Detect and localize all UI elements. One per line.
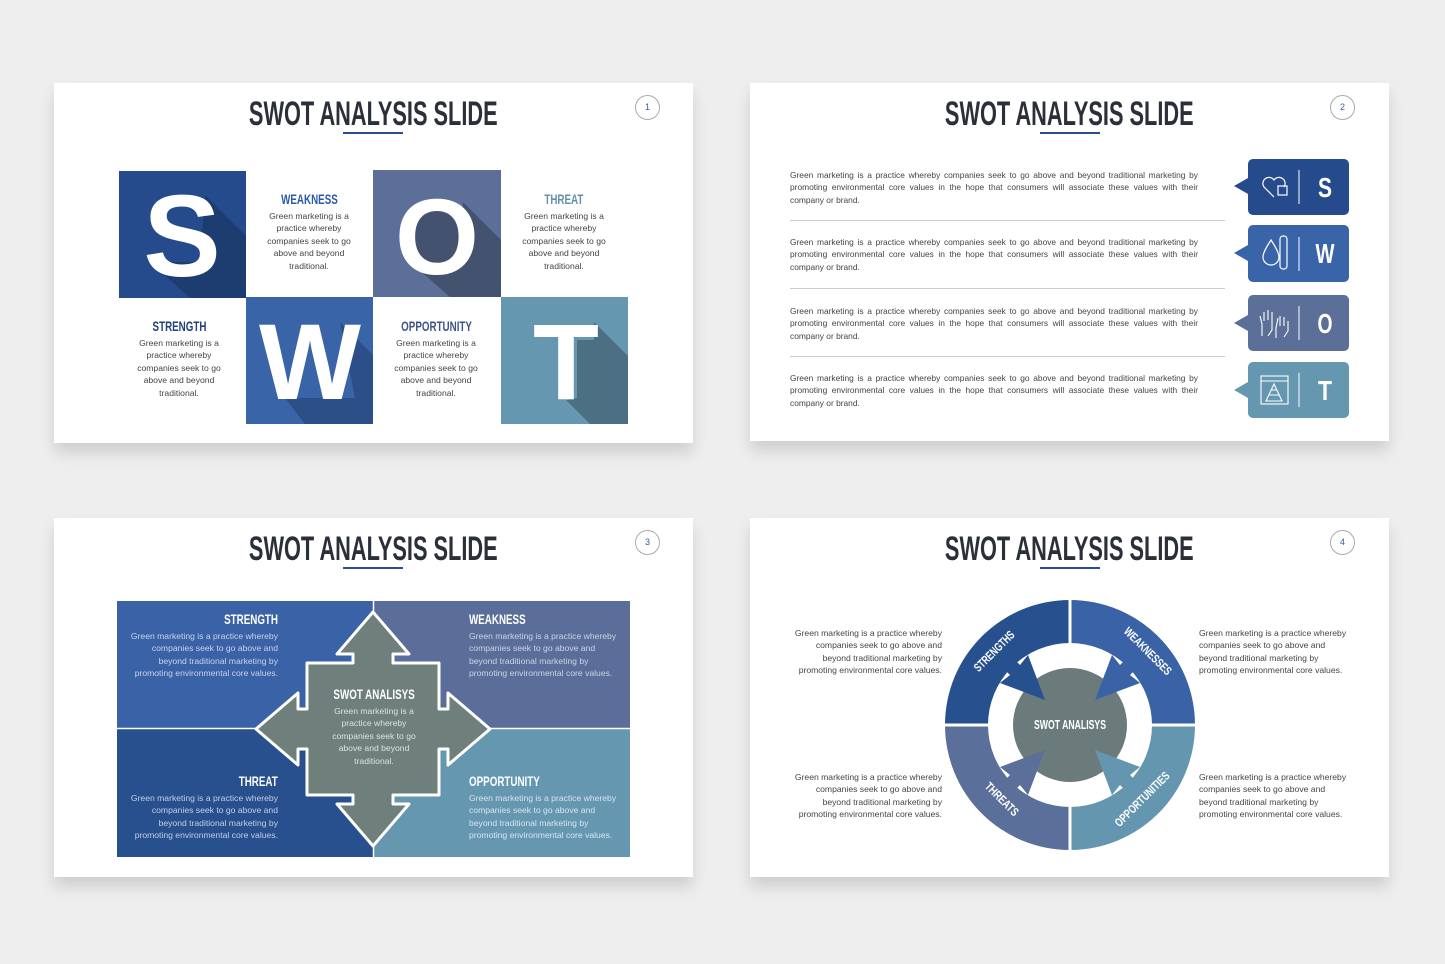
text rows — [790, 170, 1225, 408]
slide number 2 — [1330, 95, 1355, 120]
panel: slide 3 — [54, 518, 693, 877]
text rows: Green marketing is a practice whereby companies seek to go above and beyond traditional marketing by promoting environmental core values in the hope that consumers will associate these values with their company or brand. — [790, 237, 1198, 272]
panel: slide 2 — [750, 83, 1389, 441]
icons: S W O T badges: T — [1318, 375, 1332, 406]
text: opportunity: OPPORTUNITY — [401, 318, 472, 334]
chart: SWOT letter tiles — [119, 170, 628, 424]
slide number 1: 1 — [645, 102, 650, 112]
slide number 2: 2 — [1340, 102, 1345, 112]
text: strength: STRENGTH — [224, 611, 278, 627]
slide number 4 — [1330, 530, 1355, 555]
chart: SWOT letter tiles: S — [143, 171, 221, 301]
text: threat: THREAT — [544, 191, 583, 207]
heading: slide 2 title: SWOT ANALYSIS SLIDE — [945, 95, 1194, 133]
text: bottom left: Green marketing is a practice whereby companies seek to go above and beyond traditional marketing by promoting environmental core values. — [795, 772, 942, 819]
text: strength: Green marketing is a practice whereby companies seek to go above and beyond traditional marketing by promoting environmental core values. — [131, 631, 278, 678]
chart: circular swot: THREATS — [982, 779, 1022, 819]
text: threat: Green marketing is a practice whereby companies seek to go above and beyond traditional marketing by promoting environmental core values. — [131, 793, 278, 840]
text: opportunity: Green marketing is a practice whereby companies seek to go above and beyond traditional. — [394, 338, 478, 398]
text: weakness: WEAKNESS — [281, 191, 337, 207]
slide number 4: 4 — [1340, 537, 1345, 547]
panel: slide 4 — [750, 518, 1389, 877]
text: strength: STRENGTH — [152, 318, 206, 334]
text: opportunity: OPPORTUNITY — [469, 773, 540, 789]
icons: S W O T badges: S — [1318, 172, 1332, 203]
text: strength: Green marketing is a practice whereby companies seek to go above and beyond traditional. — [137, 338, 221, 398]
chart: circular swot: OPPORTUNITIES — [1112, 769, 1173, 830]
heading: slide 4 title: SWOT ANALYSIS SLIDE — [945, 530, 1194, 568]
heading: slide 3 title: SWOT ANALYSIS SLIDE — [249, 530, 498, 568]
chart: circular swot: SWOT ANALISYS — [1034, 717, 1106, 732]
slide number 1 — [635, 95, 660, 120]
chart: SWOT letter tiles: T — [533, 301, 599, 422]
text: opportunity: Green marketing is a practice whereby companies seek to go above and beyond traditional marketing by promoting environmental core values. — [469, 793, 616, 840]
icons: S W O T badges — [1234, 159, 1349, 418]
heading: slide 1 title: SWOT ANALYSIS SLIDE — [249, 95, 498, 133]
icons: S W O T badges: W — [1316, 238, 1335, 269]
text: bottom right: Green marketing is a practice whereby companies seek to go above and beyond traditional marketing by promoting environmental core values. — [1199, 772, 1346, 819]
text: weakness: Green marketing is a practice whereby companies seek to go above and beyond traditional. — [267, 211, 351, 271]
text rows: Green marketing is a practice whereby companies seek to go above and beyond traditional marketing by promoting environmental core values in the hope that consumers will associate these values with their company or brand. — [790, 170, 1198, 205]
chart: circular swot: STRENGTHS — [971, 628, 1018, 675]
icons: S W O T badges: O — [1318, 308, 1332, 339]
text: top right: Green marketing is a practice whereby companies seek to go above and beyond traditional marketing by promoting environmental core values. — [1199, 628, 1346, 675]
text: threat: Green marketing is a practice whereby companies seek to go above and beyond traditional. — [522, 211, 606, 271]
text: weakness: WEAKNESS — [469, 611, 526, 627]
slide number 3: 3 — [645, 537, 650, 547]
chart: circular swot — [945, 600, 1195, 850]
chart: SWOT letter tiles: O — [395, 176, 479, 297]
slide number 3 — [635, 530, 660, 555]
chart: quadrant panel with cross — [117, 601, 630, 857]
text rows: Green marketing is a practice whereby companies seek to go above and beyond traditional marketing by promoting environmental core values in the hope that consumers will associate these values with their company or brand. — [790, 373, 1198, 408]
text: top left: Green marketing is a practice whereby companies seek to go above and beyond traditional marketing by promoting environmental core values. — [795, 628, 942, 675]
panel: slide 1 — [54, 83, 693, 443]
chart: circular swot: WEAKNESSES — [1121, 624, 1175, 678]
text: threat: THREAT — [239, 773, 278, 789]
text: center swot analisys: Green marketing is a practice whereby companies seek to go above and beyond traditional. — [332, 706, 416, 766]
text rows: Green marketing is a practice whereby companies seek to go above and beyond traditional marketing by promoting environmental core values in the hope that consumers will associate these values with their company or brand. — [790, 306, 1198, 341]
text: center swot analisys: SWOT ANALISYS — [333, 686, 415, 702]
chart: SWOT letter tiles: W — [259, 301, 361, 422]
text: weakness: Green marketing is a practice whereby companies seek to go above and beyond traditional marketing by promoting environmental core values. — [469, 631, 616, 678]
